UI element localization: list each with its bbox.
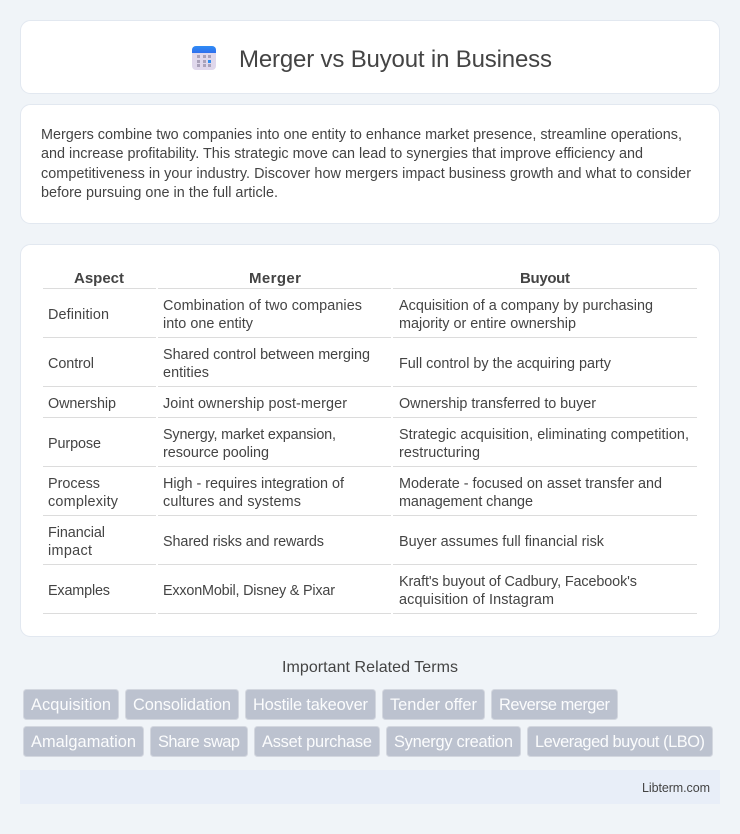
row: definition: Combination of two companies — [163, 298, 362, 314]
row: ownership — [48, 396, 596, 412]
row: process complexity: Process — [48, 476, 100, 492]
footer: Libterm.com — [642, 781, 710, 795]
row: process complexity: management change — [399, 494, 533, 510]
row: examples: Examples — [48, 583, 110, 599]
row: purpose: restructuring — [399, 445, 480, 461]
row: purpose: Strategic acquisition, eliminating competition, — [399, 427, 689, 443]
table header — [74, 270, 570, 287]
row: control — [48, 347, 612, 381]
header card — [20, 20, 720, 94]
row: definition: majority or entire ownership — [399, 316, 576, 332]
row: ownership: Ownership — [48, 396, 116, 412]
row: examples: acquisition of Instagram — [399, 592, 554, 608]
heading: related terms: Important Related Terms — [282, 659, 458, 676]
intro text: competitiveness in your industry. Discover how mergers impact business growth and what to consider — [41, 166, 691, 182]
footer — [20, 770, 720, 804]
related term chips: Hostile takeover — [253, 696, 369, 714]
row: control: Shared control between merging — [163, 347, 370, 363]
related term chips — [24, 690, 712, 756]
related term chips: Consolidation — [133, 696, 231, 714]
row: process complexity: complexity — [48, 494, 119, 510]
table header: Aspect — [74, 270, 124, 287]
intro text: and increase profitability. This strategic move can lead to synergies that improve efficiency and — [41, 146, 643, 162]
row: purpose: Purpose — [48, 436, 101, 452]
row: ownership: Ownership transferred to buyer — [399, 396, 596, 412]
intro text: before pursuing one in the full article. — [41, 185, 278, 201]
panel: introduction — [20, 104, 720, 224]
intro text: Mergers combine two companies into one entity to enhance market presence, streamline operations, — [41, 127, 682, 143]
related term chips: Tender offer — [390, 696, 478, 714]
row: definition: into one entity — [163, 316, 254, 332]
row: process complexity: Moderate - focused on asset transfer and — [399, 476, 662, 492]
row: purpose: Synergy, market expansion, — [163, 427, 336, 443]
related term chips: Synergy creation — [394, 733, 513, 751]
title: Merger vs Buyout in Business — [239, 46, 552, 73]
table header: Buyout — [520, 270, 570, 287]
row: definition: Definition — [48, 307, 109, 323]
related term chips: Leveraged buyout (LBO) — [535, 733, 705, 751]
row: definition — [48, 298, 653, 332]
row: process complexity — [48, 476, 662, 510]
row: definition: Acquisition of a company by purchasing — [399, 298, 653, 314]
row: process complexity: High - requires integration of — [163, 476, 345, 492]
row: financial impact: Shared risks and rewards — [163, 534, 324, 550]
row: control: entities — [163, 365, 209, 381]
panel: comparison table — [20, 244, 720, 636]
related term chips: Reverse merger — [499, 696, 611, 714]
row: examples: ExxonMobil, Disney & Pixar — [163, 583, 335, 599]
row: financial impact: Buyer assumes full financial risk — [399, 534, 605, 550]
row: examples: Kraft's buyout of Cadbury, Facebook's — [399, 574, 637, 590]
row: ownership: Joint ownership post-merger — [163, 396, 347, 412]
related term chips: Share swap — [158, 733, 240, 751]
row: examples — [48, 574, 637, 608]
related term chips: Acquisition — [31, 696, 111, 714]
row: purpose — [48, 427, 689, 461]
row: financial impact — [48, 525, 605, 559]
related term chips: Asset purchase — [262, 733, 372, 751]
related term chips: Amalgamation — [31, 733, 136, 751]
intro text — [41, 127, 691, 201]
row: financial impact: impact — [48, 543, 92, 559]
row: control: Control — [48, 356, 94, 372]
row: purpose: resource pooling — [163, 445, 269, 461]
row: control: Full control by the acquiring party — [399, 356, 612, 372]
icon: calendar — [192, 46, 216, 70]
table header: Merger — [249, 270, 301, 287]
row: process complexity: cultures and systems — [163, 494, 301, 510]
row: financial impact: Financial — [48, 525, 105, 541]
